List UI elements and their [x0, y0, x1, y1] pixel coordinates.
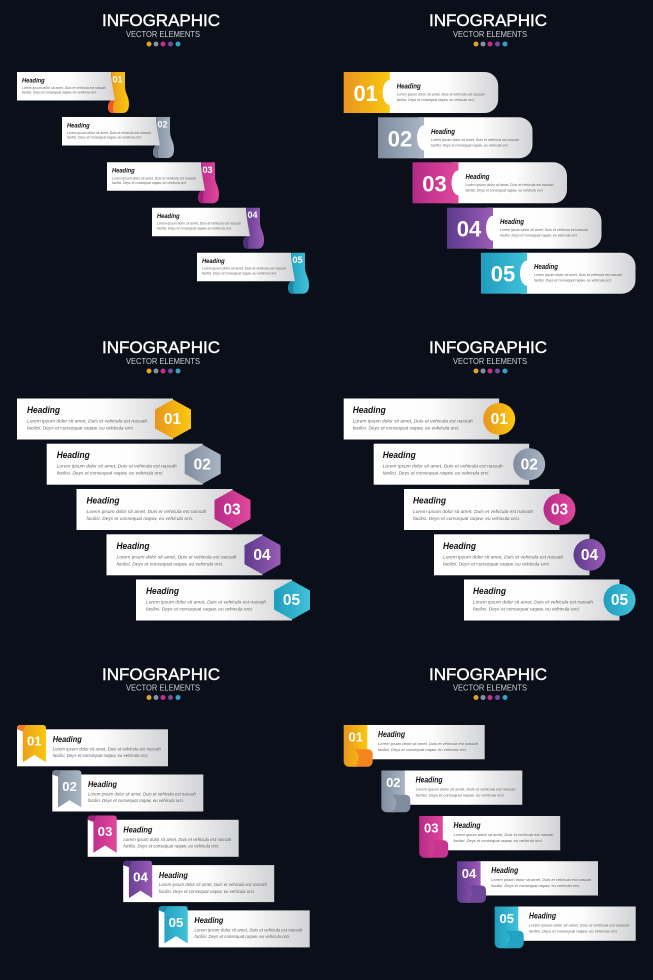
step 05	[481, 253, 636, 294]
step 04: Lorem ipsum dolor sit amet, Duis et vehicula est nassah	[491, 877, 591, 882]
step 01	[17, 72, 129, 113]
step 05: Heading	[146, 586, 179, 597]
step 04: 04	[581, 547, 598, 564]
step 03: Lorem ipsum dolor sit amet, Duis et vehicula est nassah	[413, 509, 533, 514]
step 04: facilisi. Deys et consequat raqaw, eu vehicula orci.	[500, 234, 578, 238]
step 03: 03	[98, 824, 112, 839]
colour dots	[146, 42, 180, 46]
step 05: facilisi. Deys et consequat raqaw, eu vehicula orci.	[529, 928, 618, 934]
step 05: Lorem ipsum dolor sit amet, Duis et vehicula est nassah	[534, 273, 622, 277]
step 02: facilisi. Deys et consequat raqaw, eu vehicula orci.	[416, 792, 505, 798]
step 01	[344, 72, 498, 113]
step 05	[495, 906, 636, 948]
step 01: facilisi. Deys et consequat raqaw, eu vehicula orci.	[22, 91, 97, 95]
step 03: Heading	[413, 496, 446, 506]
step 01: Heading	[353, 405, 386, 416]
step 03: 03	[422, 171, 447, 196]
step 05	[464, 580, 636, 620]
step 03	[419, 816, 560, 858]
title: INFOGRAPHIC	[102, 665, 220, 684]
colour dots	[474, 368, 508, 374]
step 04	[152, 208, 264, 249]
step 04: Heading	[443, 541, 476, 552]
step 02	[47, 444, 221, 485]
title: INFOGRAPHIC	[429, 11, 547, 30]
step 02	[62, 117, 174, 158]
step 05	[136, 580, 310, 620]
title: INFOGRAPHIC	[429, 338, 547, 357]
step 05: 05	[169, 915, 183, 930]
step 03: 03	[223, 502, 241, 519]
step 05: Heading	[202, 258, 225, 265]
step 04	[434, 534, 606, 575]
step 03	[88, 816, 239, 857]
step 04: 04	[457, 217, 482, 242]
step 04	[123, 861, 274, 902]
step 03: facilisi. Deys et consequat raqaw, eu vehicula orci.	[112, 181, 187, 185]
step 04: Lorem ipsum dolor sit amet, Duis et vehicula est nassah	[157, 222, 241, 226]
step 05: Heading	[194, 915, 224, 925]
step 03	[404, 489, 576, 530]
title: INFOGRAPHIC	[102, 11, 220, 30]
step 02: Heading	[416, 776, 443, 784]
step 02: 02	[386, 775, 401, 790]
step 02: Heading	[88, 779, 118, 789]
step 04: 04	[462, 866, 477, 881]
step 02	[52, 770, 203, 812]
step 01: 01	[27, 734, 42, 749]
step 04: Lorem ipsum dolor sit amet, Duis et vehicula est nassah	[500, 228, 588, 232]
step 01	[344, 725, 485, 767]
step 03: facilisi. Deys et consequat raqaw, eu vehicula orci.	[466, 188, 544, 192]
step 04: Heading	[116, 541, 150, 552]
step 03: Heading	[123, 824, 153, 834]
subtitle: VECTOR ELEMENTS	[126, 682, 200, 692]
step 05	[197, 253, 309, 294]
step 02: Heading	[431, 129, 456, 136]
step 04: facilisi. Deys et consequat raqaw, eu vehicula orci.	[159, 889, 255, 894]
step 05: facilisi. Deys et consequat raqaw, eu vehicula orci.	[146, 606, 253, 612]
step 01: Heading	[27, 405, 60, 416]
step 02: facilisi. Deys et consequat raqaw, eu vehicula orci.	[67, 136, 142, 140]
step 02: 02	[388, 126, 412, 151]
step 04: 04	[253, 547, 271, 564]
title: INFOGRAPHIC	[102, 338, 220, 357]
step 04: Lorem ipsum dolor sit amet, Duis et vehicula est nassah	[443, 554, 563, 559]
step 05: 05	[292, 255, 303, 265]
step 01	[17, 725, 168, 766]
step 01: 01	[353, 81, 378, 106]
colour dots	[474, 42, 508, 46]
step 03: 03	[424, 821, 438, 836]
step 03: facilisi. Deys et consequat raqaw, eu vehicula orci.	[123, 843, 219, 848]
subtitle: VECTOR ELEMENTS	[126, 356, 200, 366]
subtitle: VECTOR ELEMENTS	[126, 29, 200, 39]
step 01: Heading	[378, 730, 405, 739]
step 01: Heading	[53, 734, 82, 744]
step 04	[106, 534, 280, 575]
step 05: Heading	[534, 264, 559, 271]
step 03	[412, 162, 567, 203]
step 01: Heading	[397, 84, 421, 90]
step 02: 02	[521, 456, 538, 473]
step 04: Heading	[500, 219, 525, 226]
step 01: facilisi. Deys et consequat raqaw, eu vehicula orci.	[353, 426, 460, 430]
step 04: facilisi. Deys et consequat raqaw, eu vehicula orci.	[443, 561, 550, 566]
step 01: facilisi. Deys et consequat raqaw, eu vehicula orci.	[27, 426, 134, 430]
step 03: Heading	[466, 174, 490, 181]
step 03: 03	[551, 502, 568, 519]
step 05: Heading	[473, 586, 506, 597]
step 03: 03	[202, 165, 213, 175]
subtitle: VECTOR ELEMENTS	[453, 356, 527, 366]
step 01: Lorem ipsum dolor sit amet, Duis et vehicula est nassah	[353, 418, 473, 424]
step 04: 04	[247, 210, 258, 220]
colour dots	[146, 695, 180, 700]
step 01: Lorem ipsum dolor sit amet, Duis et vehicula est nassah	[378, 741, 478, 746]
step 01: 01	[491, 411, 508, 428]
panel: top-right rounded cards	[344, 11, 636, 294]
step 01: 01	[164, 411, 181, 428]
step 04: Lorem ipsum dolor sit amet, Duis et vehicula est nassah	[159, 882, 268, 887]
step 02	[378, 117, 532, 158]
subtitle: VECTOR ELEMENTS	[453, 682, 527, 692]
step 03: Heading	[454, 821, 481, 830]
panel: bottom-right scroll tabs	[344, 665, 636, 948]
step 02: Lorem ipsum dolor sit amet, Duis et vehicula est nassah	[67, 131, 151, 135]
step 04: Heading	[157, 213, 180, 220]
step 02: Lorem ipsum dolor sit amet, Duis et vehicula est nassah	[431, 138, 519, 142]
step 01: 01	[112, 74, 123, 84]
step 02	[381, 770, 522, 812]
step 01: 01	[348, 730, 363, 745]
step 04: facilisi. Deys et consequat raqaw, eu vehicula orci.	[116, 561, 224, 566]
colour dots	[474, 695, 508, 700]
step 02: 02	[157, 120, 168, 130]
step 02: Lorem ipsum dolor sit amet, Duis et vehicula est nassah	[57, 464, 177, 469]
step 05: Lorem ipsum dolor sit amet, Duis et vehicula est nassah	[473, 600, 593, 604]
step 03: Lorem ipsum dolor sit amet, Duis et vehicula est nassah	[86, 509, 207, 514]
step 01: facilisi. Deys et consequat raqaw, eu vehicula orci.	[53, 753, 149, 758]
step 03	[76, 489, 250, 530]
step 01: Lorem ipsum dolor sit amet, Duis et vehicula est nassah	[22, 86, 106, 90]
panel: middle-left hexagon badges	[17, 338, 310, 620]
step 02: 02	[194, 456, 211, 473]
step 03: Heading	[112, 168, 135, 175]
step 02: Heading	[67, 122, 90, 129]
step 04: Heading	[159, 870, 189, 880]
step 03	[107, 162, 219, 203]
step 02: facilisi. Deys et consequat raqaw, eu vehicula orci.	[383, 471, 490, 476]
panel: bottom-left bookmark badges	[17, 665, 310, 947]
step 05: facilisi. Deys et consequat raqaw, eu vehicula orci.	[202, 271, 277, 275]
step 05: 05	[491, 262, 515, 287]
step 03: Lorem ipsum dolor sit amet, Duis et vehicula est nassah	[123, 837, 232, 842]
step 01	[344, 398, 515, 440]
step 03: facilisi. Deys et consequat raqaw, eu vehicula orci.	[86, 516, 194, 521]
step 04	[447, 208, 602, 249]
step 04	[457, 861, 598, 903]
step 05: Lorem ipsum dolor sit amet, Duis et vehicula est nassah	[202, 267, 286, 271]
step 05: Lorem ipsum dolor sit amet, Duis et vehicula est nassah	[146, 600, 266, 604]
step 04: Lorem ipsum dolor sit amet, Duis et vehicula est nassah	[116, 554, 237, 559]
panel: middle-right circle badges	[344, 338, 636, 620]
step 02: Heading	[57, 450, 90, 461]
step 02: Lorem ipsum dolor sit amet, Duis et vehicula est nassah	[88, 792, 197, 796]
step 03: Heading	[86, 496, 120, 506]
step 05: 05	[283, 592, 300, 609]
step 03: facilisi. Deys et consequat raqaw, eu vehicula orci.	[413, 516, 520, 521]
step 01: Lorem ipsum dolor sit amet, Duis et vehicula est nassah	[397, 92, 485, 96]
step 05: facilisi. Deys et consequat raqaw, eu vehicula orci.	[473, 606, 580, 612]
step 01	[17, 398, 191, 440]
step 04: 04	[133, 869, 148, 884]
colour dots	[146, 368, 180, 374]
step 02: facilisi. Deys et consequat raqaw, eu vehicula orci.	[88, 798, 184, 803]
step 02: Lorem ipsum dolor sit amet, Duis et vehicula est nassah	[416, 786, 516, 792]
step 04: facilisi. Deys et consequat raqaw, eu vehicula orci.	[491, 883, 580, 888]
step 05: Lorem ipsum dolor sit amet, Duis et vehicula est nassah	[194, 927, 303, 932]
step 02: Heading	[383, 450, 416, 461]
step 05	[159, 906, 310, 947]
step 03: Lorem ipsum dolor sit amet, Duis et vehicula est nassah	[112, 176, 196, 180]
subtitle: VECTOR ELEMENTS	[453, 29, 527, 39]
step 03: Lorem ipsum dolor sit amet, Duis et vehicula est nassah	[466, 183, 554, 187]
step 03: Lorem ipsum dolor sit amet, Duis et vehicula est nassah	[454, 832, 554, 837]
step 04: Heading	[491, 866, 518, 875]
step 05: 05	[499, 911, 514, 926]
step 02: facilisi. Deys et consequat raqaw, eu vehicula orci.	[431, 143, 509, 147]
step 01: Lorem ipsum dolor sit amet, Duis et vehicula est nassah	[27, 418, 147, 424]
step 03: facilisi. Deys et consequat raqaw, eu vehicula orci.	[454, 838, 543, 843]
step 02: Lorem ipsum dolor sit amet, Duis et vehicula est nassah	[383, 464, 503, 469]
panel: top-left ribbon tabs	[17, 11, 309, 294]
title: INFOGRAPHIC	[429, 665, 547, 684]
step 05: Lorem ipsum dolor sit amet, Duis et vehicula est nassah	[529, 922, 629, 928]
step 04: facilisi. Deys et consequat raqaw, eu vehicula orci.	[157, 226, 232, 230]
step 02: 02	[62, 779, 77, 794]
step 01: facilisi. Deys et consequat raqaw, eu vehicula orci.	[378, 747, 467, 752]
step 05: facilisi. Deys et consequat raqaw, eu vehicula orci.	[194, 934, 290, 939]
step 05: Heading	[529, 912, 556, 920]
step 01: Lorem ipsum dolor sit amet, Duis et vehicula est nassah	[53, 746, 161, 751]
step 01: facilisi. Deys et consequat raqaw, eu vehicula orci.	[397, 98, 475, 102]
step 05: facilisi. Deys et consequat raqaw, eu vehicula orci.	[534, 279, 612, 283]
step 02	[374, 444, 545, 485]
step 01: Heading	[22, 77, 45, 84]
step 02: facilisi. Deys et consequat raqaw, eu vehicula orci.	[57, 471, 164, 476]
step 05: 05	[611, 592, 628, 609]
